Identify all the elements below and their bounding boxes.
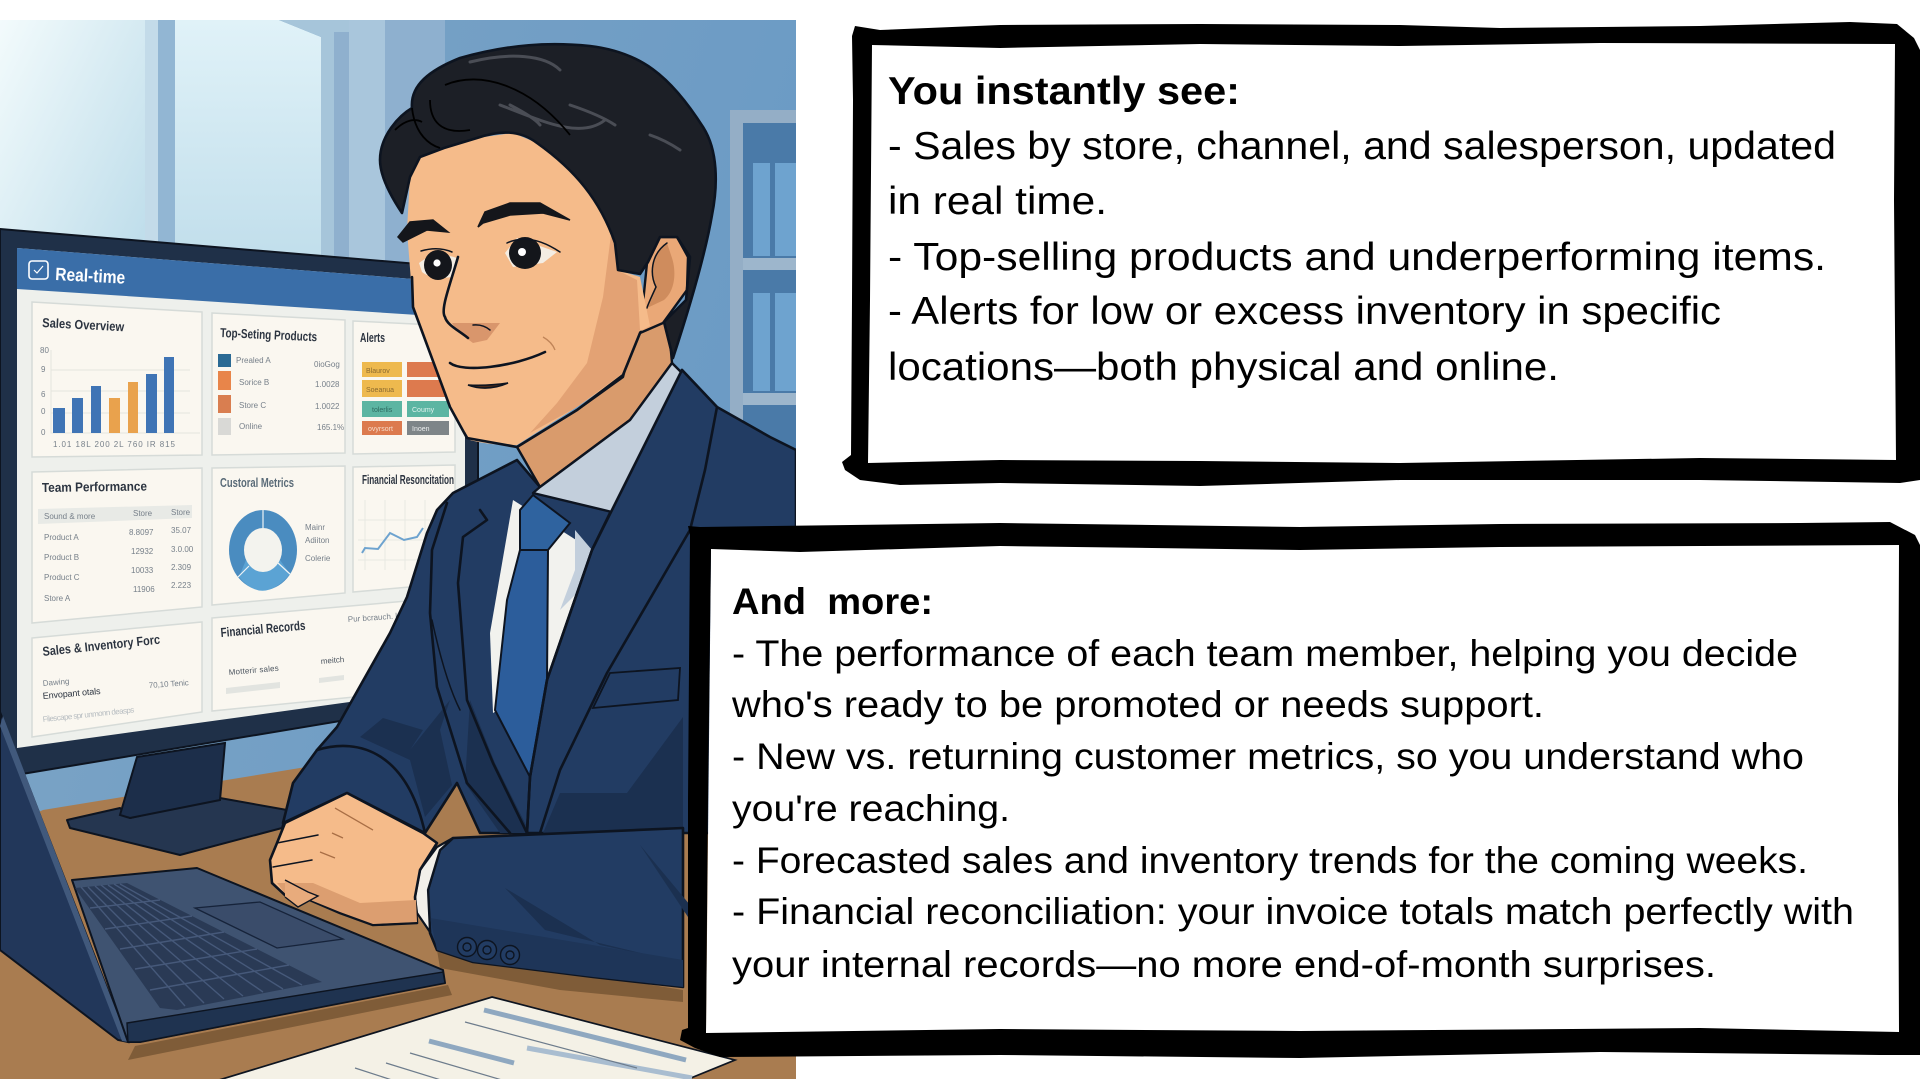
face shadow	[530, 227, 640, 433]
mouth	[450, 337, 555, 388]
panel: sales overview: 6	[41, 390, 46, 399]
panel: sales and inventory forecast: Dawing	[42, 677, 70, 688]
panel: customer metrics with donut: Adiiton	[305, 536, 329, 545]
panel: sales and inventory forecast: Filescape spr unmonn deasps	[42, 705, 135, 724]
text block 2	[731, 581, 1854, 985]
panel: sales overview: Sales Overview	[42, 315, 125, 334]
panel: sales overview: 9	[41, 365, 46, 374]
neck	[517, 318, 672, 487]
desk	[0, 768, 796, 1079]
panel: sales and inventory forecast: Envopant otals	[42, 686, 101, 701]
text block 1: You instantly see:	[888, 70, 1240, 113]
text block 1: locations—both physical and online.	[888, 346, 1559, 389]
panel: and more	[680, 522, 1920, 1058]
panel: team performance: 35.07	[171, 526, 192, 535]
panel: team performance: 2.223	[171, 581, 192, 590]
panel: team performance: Store	[133, 509, 153, 518]
panel: alerts: Coumy	[412, 407, 435, 414]
panel: top-selling products: Top-Seting Products	[220, 325, 317, 344]
panel: top-selling products: 1.0028	[315, 380, 340, 389]
hair	[380, 44, 716, 358]
panel: sales overview: 80	[40, 346, 49, 355]
shirt cuff	[415, 838, 453, 932]
panel: sales overview: 1.01 18L 200 2L 760 IR 815	[53, 440, 176, 449]
panel: team performance	[32, 468, 202, 623]
panel: top-selling products: Online	[239, 422, 263, 431]
panel: financial records: Financial Records	[220, 618, 306, 640]
panel: financial records: meitch	[320, 655, 345, 666]
text block 2: - New vs. returning customer metrics, so you understand who	[732, 736, 1804, 777]
text block 1: in real time.	[888, 180, 1107, 223]
text block 2: - Financial reconciliation: your invoice totals match perfectly with	[732, 891, 1854, 932]
panel: alerts: Alerts	[360, 330, 385, 345]
laptop lid	[0, 712, 128, 1042]
panel: sales overview: 0	[41, 428, 46, 437]
panel: you instantly see	[842, 22, 1920, 486]
panel: customer metrics with donut: Mainr	[305, 523, 325, 532]
right eyebrow and eye	[478, 203, 570, 269]
text block 2: you're reaching.	[732, 788, 1010, 829]
document on desk	[219, 997, 735, 1080]
panel: alerts: Inoen	[412, 426, 430, 433]
panel: team performance: 12932	[131, 547, 154, 556]
panel: team performance: 2.309	[171, 563, 192, 572]
panel: sales overview: 0	[41, 407, 46, 416]
panel: financial reconciliation	[353, 465, 455, 592]
panel: top-selling products: Sorice B	[239, 378, 269, 387]
laptop	[0, 712, 452, 1060]
dashboard screen	[17, 248, 465, 748]
suit jacket	[283, 370, 796, 833]
office background with windows	[0, 20, 796, 812]
panel: customer metrics with donut	[212, 466, 345, 605]
panel: team performance: Product C	[44, 573, 80, 582]
panel: alerts	[353, 321, 455, 454]
nose	[444, 257, 500, 343]
panel: top-selling products: Prealed A	[236, 356, 271, 365]
panel: alerts: Blaurov	[366, 368, 390, 375]
panel: top-selling products: 165.1%	[317, 423, 344, 432]
hand-drawn frame 1	[842, 22, 1920, 486]
jacket shading	[543, 717, 683, 833]
jacket right lapel	[527, 370, 717, 833]
ear	[640, 237, 688, 333]
dashboard header: Real-time	[55, 264, 126, 288]
panel: top-selling products: 1.0022	[315, 402, 340, 411]
illustration: businessman at desk with dashboard	[0, 20, 796, 1080]
panel: team performance: Store	[171, 508, 191, 517]
hand-drawn frame 2	[680, 522, 1920, 1058]
monitor stand	[67, 743, 287, 855]
hand	[270, 793, 437, 925]
tie	[495, 495, 570, 777]
laptop base	[72, 868, 445, 1042]
text block 1: - Alerts for low or excess inventory in specific	[888, 290, 1721, 333]
keyboard	[75, 883, 322, 1010]
panel: financial records: Pur bcrauch. lo	[348, 611, 402, 624]
face	[398, 133, 650, 447]
panel: team performance: 8.8097	[129, 528, 154, 537]
panel: customer metrics with donut: Custoral Metrics	[220, 475, 294, 490]
text block 2: And more:	[732, 581, 933, 622]
desk shadow under arm	[437, 950, 683, 1002]
panel: alerts: Soeanua	[366, 387, 394, 394]
white panel fill	[706, 545, 1899, 1033]
panel: team performance: Team Performance	[42, 479, 147, 495]
panel: sales and inventory forecast: 70,10 Tenic	[149, 678, 189, 690]
panel: alerts: ovyrsort	[368, 426, 393, 433]
panel: team performance: Store A	[44, 594, 71, 603]
dashboard header	[17, 248, 414, 315]
text block 1: - Sales by store, channel, and salesperson, updated	[888, 125, 1836, 168]
monitor bezel	[0, 229, 478, 780]
jaw outline	[412, 277, 640, 447]
touchpad	[195, 902, 343, 948]
panel: sales overview	[32, 302, 202, 457]
sleeve cuff crease	[317, 746, 425, 833]
panel: team performance: Product B	[44, 553, 79, 562]
panel: top-selling products	[212, 313, 345, 455]
panel: team performance: 11906	[133, 585, 155, 594]
panel: financial reconciliation: Financial Resoncitation	[362, 472, 454, 487]
text block 1: - Top-selling products and underperforming items.	[888, 236, 1826, 279]
panel: team performance: 10033	[131, 566, 154, 575]
panel: team performance: Sound & more	[44, 512, 96, 521]
left eyebrow and eye	[398, 220, 457, 280]
panel: financial records: Motterir sales	[228, 664, 279, 677]
right forearm sleeve	[428, 828, 690, 987]
panel: sales and inventory forecast: Sales & Inventory Forc	[42, 632, 161, 659]
cuff buttons	[458, 938, 520, 964]
panel: financial records	[211, 600, 404, 712]
text block 2: your internal records—no more end-of-month surprises.	[732, 944, 1716, 985]
text block 2: - Forecasted sales and inventory trends for the coming weeks.	[732, 840, 1808, 881]
laptop shadow	[128, 985, 452, 1060]
panel: top-selling products: Store C	[239, 401, 266, 410]
text block 1	[888, 70, 1836, 389]
panel: alerts: tolerlis	[372, 407, 393, 414]
panel: top-selling products: 0ioGog	[314, 360, 340, 369]
panel: customer metrics with donut: Colerie	[305, 554, 331, 563]
shirt	[490, 500, 591, 713]
text block 2: - The performance of each team member, helping you decide	[732, 633, 1798, 674]
shirt collar	[533, 363, 682, 512]
text block 2: who's ready to be promoted or needs support.	[731, 684, 1544, 725]
chest pocket	[593, 668, 680, 708]
panel: sales and inventory forecast	[32, 622, 202, 737]
businessman	[270, 44, 796, 1002]
panel: team performance: Product A	[44, 533, 79, 542]
panel: team performance: 3.0.00	[171, 545, 194, 554]
